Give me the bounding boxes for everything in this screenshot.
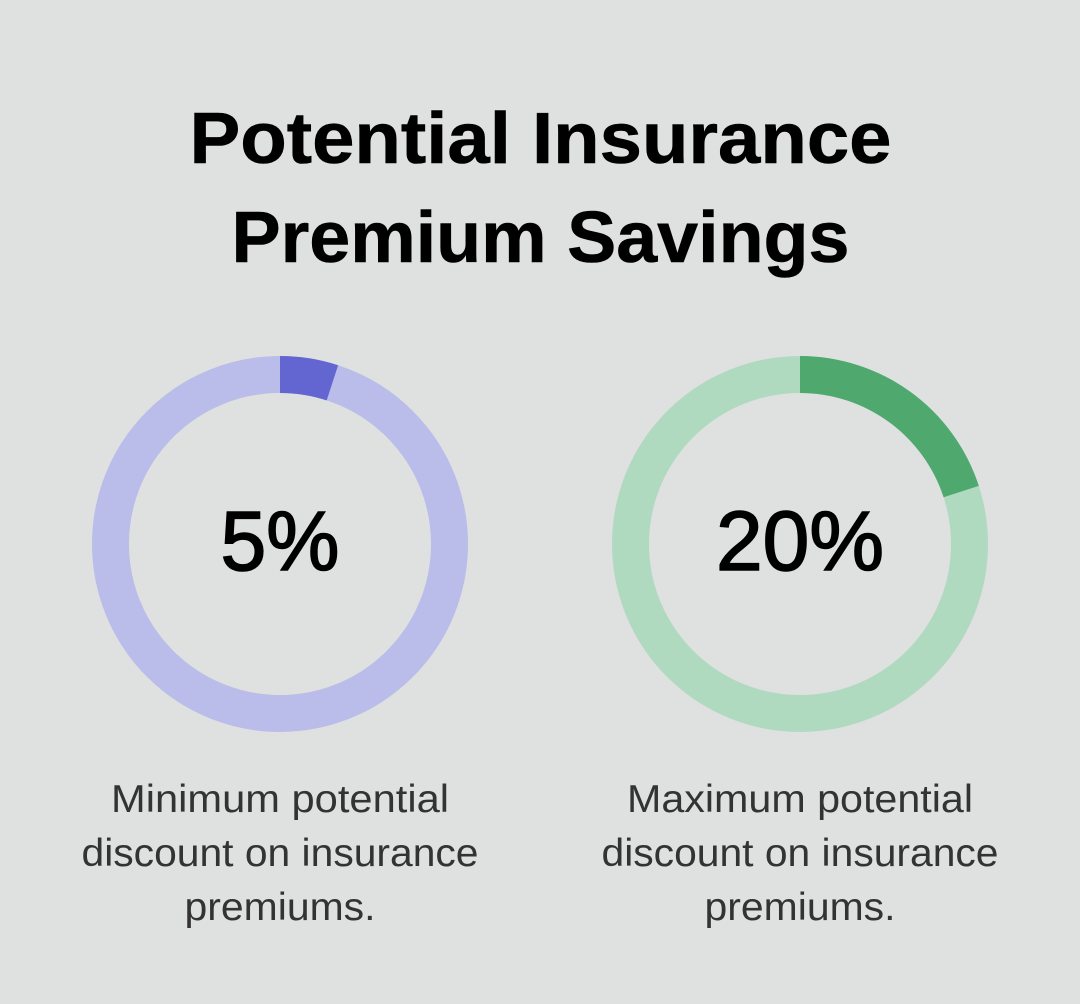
panel: maximum discount: [602, 356, 998, 929]
description: maximum discount: discount on insurance: [602, 832, 998, 875]
description: minimum discount: [82, 778, 478, 929]
panel: minimum discount: [82, 356, 478, 929]
description: minimum discount: discount on insurance: [82, 832, 478, 875]
value: 20%: 20%: [716, 494, 884, 588]
title: Potential Insurance: [190, 99, 892, 179]
description: maximum discount: [602, 778, 998, 929]
description: minimum discount: premiums.: [184, 886, 376, 929]
title: Premium Savings: [232, 198, 850, 278]
title: [190, 99, 892, 278]
donut chart: 20%: [630, 356, 979, 714]
donut chart: 5%: [110, 356, 450, 714]
description: minimum discount: Minimum potential: [111, 778, 449, 821]
value: 5%: 5%: [220, 494, 340, 588]
description: maximum discount: Maximum potential: [627, 778, 973, 821]
description: maximum discount: premiums.: [704, 886, 896, 929]
